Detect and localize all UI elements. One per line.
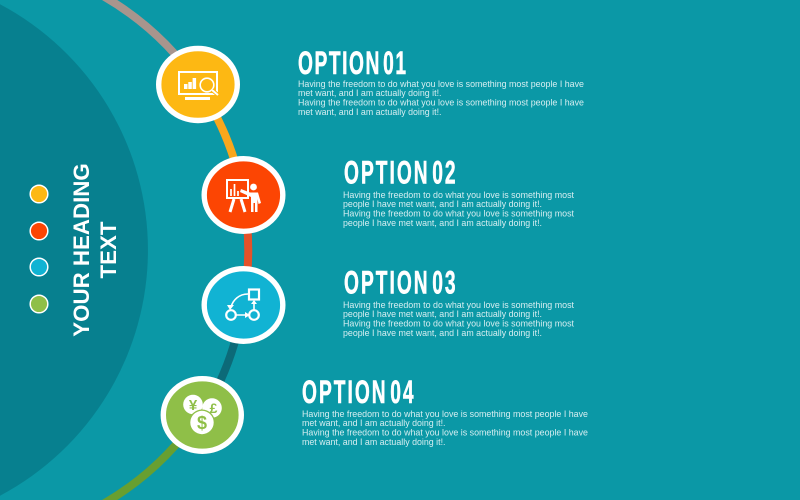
body: option 02: people I have met want, and I am actually doing it!.	[343, 199, 542, 209]
body: option 02: Having the freedom to do what you love is something most	[343, 208, 574, 218]
title: option 02: OPTION 02	[344, 154, 456, 191]
body: option 01: Having the freedom to do what you love is something most people I have	[298, 79, 584, 89]
body: option 02: people I have met want, and I am actually doing it!.	[343, 218, 542, 228]
body: option 01: met want, and I am actually doing it!.	[298, 107, 442, 117]
title: option 04: OPTION 04	[302, 374, 414, 410]
node 2: red presenter icon	[204, 159, 283, 231]
text block: option 04	[302, 374, 588, 447]
heading second line: TEXT	[96, 221, 121, 278]
body: option 01	[298, 79, 584, 117]
node 4: green currency icon	[163, 379, 241, 451]
body: option 01: met want, and I am actually doing it!.	[298, 88, 442, 98]
body: option 04: Having the freedom to do what you love is something most people I have	[302, 409, 588, 419]
body: option 03: Having the freedom to do what you love is something most	[343, 300, 574, 310]
body: option 03: people I have met want, and I am actually doing it!.	[343, 328, 542, 338]
node 1: yellow monitor icon	[159, 48, 237, 120]
legend dots	[30, 185, 48, 313]
text block: option 01	[298, 45, 584, 117]
icon: flow diagram	[226, 290, 259, 320]
body: option 04: met want, and I am actually doing it!.	[302, 418, 446, 428]
body: option 02: Having the freedom to do what you love is something most	[343, 190, 574, 200]
text block: option 03	[343, 264, 574, 338]
body: option 03	[343, 300, 574, 338]
icon: presenter at board	[227, 180, 261, 212]
icon: currency coins	[183, 395, 222, 436]
node 3: blue flow icon	[204, 269, 283, 341]
panel: left dark semicircle	[0, 4, 148, 496]
connecting arc	[102, 0, 248, 500]
body: option 01: Having the freedom to do what you love is something most people I have	[298, 98, 584, 108]
icon: currency coins: £	[210, 400, 218, 416]
icon: currency coins: ¥	[189, 397, 198, 414]
body: option 04: Having the freedom to do what you love is something most people I have	[302, 428, 588, 438]
icon: currency coins: $	[197, 413, 207, 433]
body: option 02	[343, 190, 574, 228]
body: option 04	[302, 409, 588, 447]
body: option 03: Having the freedom to do what you love is something most	[343, 318, 574, 328]
body: option 04: met want, and I am actually doing it!.	[302, 437, 446, 447]
heading: your heading text: YOUR HEADING	[69, 163, 94, 337]
title: option 01: OPTION 01	[298, 45, 406, 81]
title: option 03: OPTION 03	[344, 264, 456, 301]
body: option 03: people I have met want, and I am actually doing it!.	[343, 309, 542, 319]
icon: monitor with magnifier	[179, 72, 218, 100]
text block: option 02	[343, 154, 574, 228]
